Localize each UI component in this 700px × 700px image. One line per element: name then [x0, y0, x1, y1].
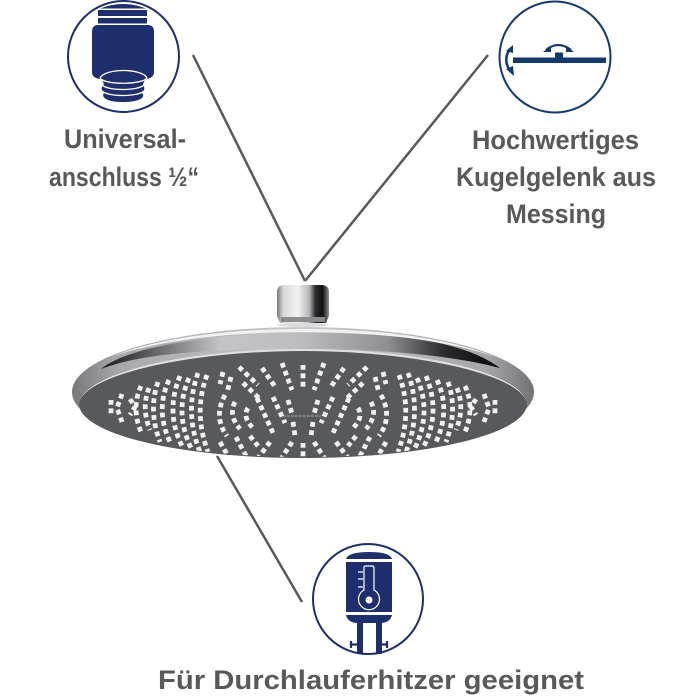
line: connector to ball joint [305, 55, 488, 281]
line: connector to water heater [217, 456, 302, 602]
text: ball joint label [456, 125, 656, 229]
icon: universal connector [68, 1, 179, 112]
logo: small centre mark [283, 415, 321, 417]
text: ball joint label: Hochwertiges [472, 125, 639, 155]
text: ball joint label: Messing [506, 199, 606, 229]
icon: ball joint [500, 2, 610, 112]
face: dark spray plate [79, 350, 527, 458]
text: universal connection label: Universal- [64, 124, 186, 154]
text: water heater label: Für Durchlauferhitzer geeignet [158, 665, 584, 695]
nozzles: white spray dots [111, 363, 495, 462]
text: ball joint label: Kugelgelenk aus [456, 162, 656, 192]
rim: chrome outer ring [72, 327, 534, 457]
icon: water heater [313, 544, 423, 654]
text: universal connection label: anschluss ½“ [49, 162, 199, 192]
connector: chrome swivel [277, 285, 329, 327]
shower head [72, 285, 534, 462]
text: universal connection label [49, 124, 199, 192]
line: connector to universal connection [193, 55, 305, 281]
